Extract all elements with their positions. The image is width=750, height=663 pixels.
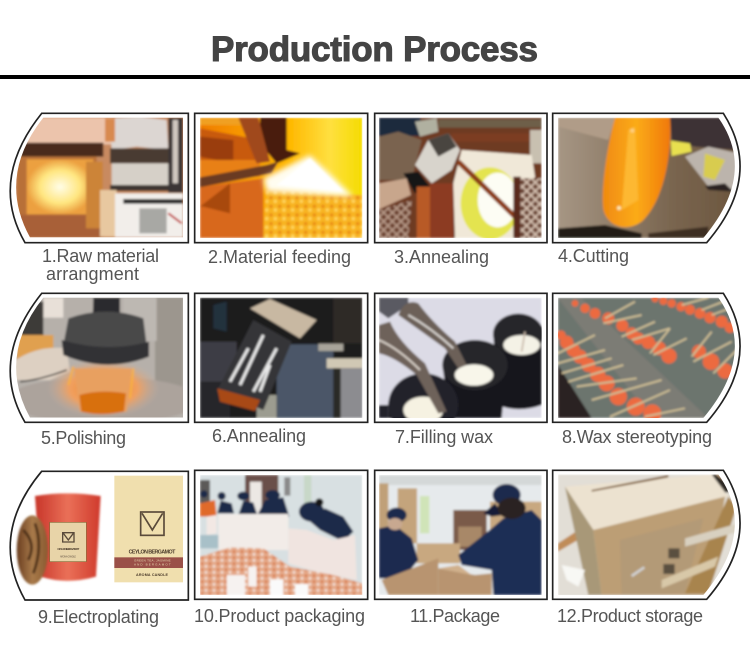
product box [114,476,183,582]
frame [553,293,740,422]
frame [553,113,740,243]
caption 10: 10.Product packaging [194,606,365,626]
caption 3: 3.Annealing [394,247,489,267]
panel: step 10 product packaging [195,470,368,599]
panel: step 11 package [375,470,547,599]
caption 7: 7.Filling wax [395,427,493,447]
product box: GREEN TEA, JASMINE [134,559,171,563]
panel: step 7 filling wax [375,293,547,437]
wooden lid [17,515,48,585]
frame [375,113,547,243]
caption 1: arrangment [46,264,139,284]
frame [195,470,368,599]
caption 12: 12.Product storage [557,606,703,626]
header divider [0,75,750,79]
photo: taped cardboard carton [558,474,745,596]
frame [375,470,547,599]
panel: step 8 wax stereotyping [553,293,745,422]
frame [10,471,188,600]
product box: CEYLON BERGAMOT [129,550,176,556]
candle glass [35,493,101,581]
candle label: AROMA CANDLE [60,555,76,558]
panel: step 2 material feeding [195,113,368,243]
panel: step 5 polishing [0,293,200,423]
photo: rows of orange candles [558,298,735,418]
caption 1 [42,246,159,284]
panel: step 9 electroplating [10,471,188,600]
caption 6: 6.Annealing [212,426,306,446]
photo: jar in mould [200,298,362,418]
photo: workers sealing cartons [379,475,542,595]
panel: step 6 annealing [195,293,368,422]
frame [10,293,188,422]
photo: furnace and machinery [16,118,183,238]
product box: AND BERGAMOT [134,562,171,566]
candle label: CEYLON BERGAMOT [57,547,80,551]
caption 1: 1.Raw material [42,246,159,266]
panel: step 1 raw material [0,113,188,243]
panel: step 4 cutting [553,113,745,243]
photo: molten material [200,118,362,238]
photo: workers packing rows of cards [200,475,362,595]
product box: AROMA CANDLE [136,573,169,577]
photo: pouring wax into black cups [379,298,542,418]
photo: gloved hands at furnace [379,118,542,239]
frame [553,470,740,599]
frame [375,293,547,422]
panel: step 3 annealing [375,113,547,243]
caption 5: 5.Polishing [41,428,126,448]
frame [195,293,368,422]
photo: candle and box [17,476,183,585]
caption 9: 9.Electroplating [38,607,159,627]
frame [10,113,188,243]
title: Production Process [211,30,538,69]
caption 8: 8.Wax stereotyping [562,427,712,447]
caption 11: 11.Package [410,606,500,626]
candle label [50,522,86,562]
caption 4: 4.Cutting [558,246,629,266]
frame [195,113,368,243]
caption 2: 2.Material feeding [208,247,351,267]
photo: glowing glass gob [558,118,745,238]
photo: polishing head over glass [16,298,183,418]
panel: step 12 product storage [553,470,745,599]
